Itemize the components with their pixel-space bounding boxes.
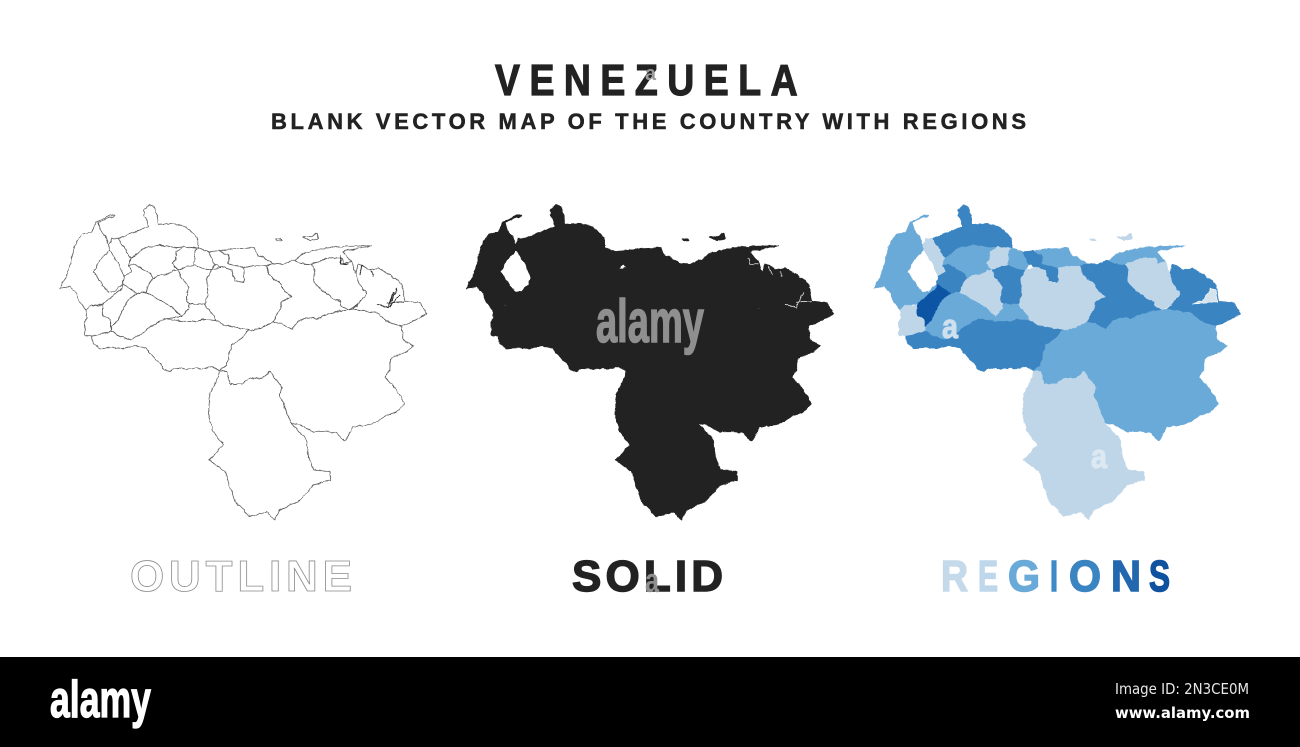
image id: Image ID: 2N3CE0M bbox=[1115, 680, 1249, 698]
region: Portuguesa bbox=[961, 270, 1003, 317]
region: Falcon bbox=[932, 205, 1012, 258]
website: www.alamy.com bbox=[1115, 704, 1250, 722]
region: Zulia bbox=[873, 214, 937, 310]
delta light patch bbox=[1192, 288, 1217, 304]
title: VENEZUELA bbox=[495, 55, 798, 105]
region: Aragua bbox=[1022, 251, 1058, 282]
watermark: letter on title: a bbox=[645, 63, 657, 85]
region: Delta Amacuro bbox=[1167, 264, 1241, 327]
region: Trujillo bbox=[937, 265, 967, 293]
label: regions: O bbox=[1069, 552, 1101, 601]
label: outline: OUTLINE bbox=[130, 552, 352, 601]
watermark: letter on solid label: a bbox=[645, 562, 660, 600]
footer logo: alamy bbox=[50, 671, 151, 729]
region: Miranda bbox=[1034, 248, 1088, 268]
label: solid: SOLID bbox=[572, 552, 723, 601]
watermark: letter on Barinas: a bbox=[942, 308, 959, 346]
region: Yaracuy bbox=[986, 247, 1012, 270]
watermark: alamy centre: alamy bbox=[596, 288, 704, 355]
region: Anzoategui bbox=[1081, 260, 1162, 329]
label: regions: N bbox=[1111, 552, 1141, 601]
footer bar bbox=[0, 657, 1300, 747]
region: Bolivar bbox=[1034, 309, 1227, 441]
label: regions: G bbox=[1008, 552, 1040, 601]
label: regions: R bbox=[941, 552, 968, 601]
map: outline bbox=[59, 205, 427, 520]
map: regions bbox=[873, 205, 1241, 520]
delta white channels bbox=[748, 258, 812, 308]
island: Margarita bbox=[1117, 233, 1133, 241]
region: Guarico bbox=[1018, 266, 1106, 330]
region: Apure bbox=[906, 319, 1064, 372]
region: Sucre bbox=[1109, 246, 1186, 264]
map: solid bbox=[466, 205, 834, 520]
delta detail lines bbox=[341, 255, 403, 308]
region: Barinas tail bbox=[979, 303, 1031, 322]
label: regions: E bbox=[978, 552, 998, 601]
label: regions: I bbox=[1050, 552, 1058, 601]
region: Barinas bbox=[926, 292, 996, 340]
region: Carabobo bbox=[1008, 248, 1029, 270]
region: Zulia east bbox=[923, 238, 946, 277]
region: Amazonas bbox=[1022, 370, 1145, 520]
region: Lara bbox=[942, 245, 997, 278]
watermark: letter on Amazonas: a bbox=[1091, 438, 1108, 476]
region: Tachira bbox=[898, 303, 926, 337]
island: Blanquilla bbox=[1089, 238, 1096, 241]
label: regions bbox=[941, 552, 1170, 601]
region: Monagas bbox=[1126, 258, 1181, 310]
subtitle: BLANK VECTOR MAP OF THE COUNTRY WITH REGIONS bbox=[271, 109, 1026, 134]
label: regions: S bbox=[1149, 552, 1170, 601]
region: Merida bbox=[917, 283, 951, 327]
region: Cojedes bbox=[992, 265, 1026, 304]
